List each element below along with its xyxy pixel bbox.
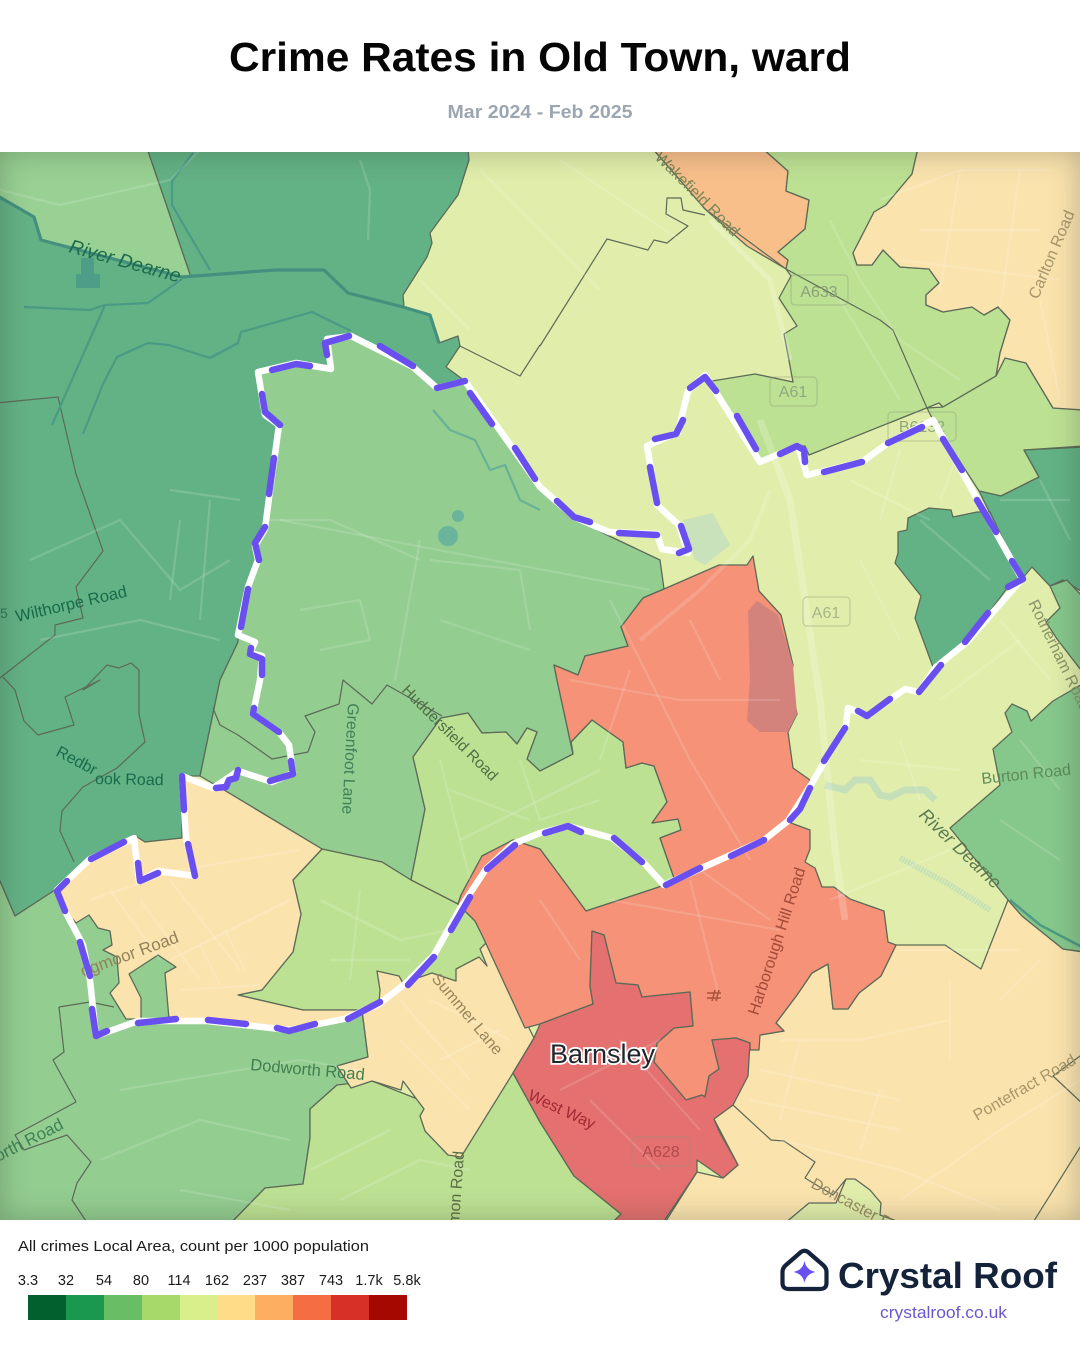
darker hospital patch xyxy=(747,601,797,732)
area: east dark green xyxy=(979,447,1080,593)
legend: colour scale: 80 xyxy=(133,1273,149,1289)
area: south light green xyxy=(230,1073,621,1224)
legend: colour scale: 1.7k xyxy=(355,1273,383,1289)
website link: crystalroof.co.uk xyxy=(880,1304,1008,1322)
area: north-east light green xyxy=(705,148,1010,462)
legend: colour scale: 32 xyxy=(58,1273,74,1289)
map labels: Pontefract Road xyxy=(970,1052,1079,1124)
legend: colour scale: 114 xyxy=(167,1273,191,1289)
area: Hogmoor tan xyxy=(55,776,362,1030)
map labels: Huddersfield Road xyxy=(398,682,501,785)
map labels: River Dearne xyxy=(915,804,1005,893)
area: Doncaster Road pale patch xyxy=(788,1178,896,1220)
map labels: West Way xyxy=(525,1087,598,1133)
map labels: 5 xyxy=(0,605,8,621)
river Dearne east xyxy=(825,780,935,800)
map labels: Dodworth Road xyxy=(250,1056,365,1084)
legend: colour scale: 54 xyxy=(96,1273,112,1289)
area: Carlton tan xyxy=(853,148,1080,410)
area: inner dark green xyxy=(895,508,1022,667)
logo: Crystal Roof: Crystal Roof xyxy=(838,1255,1058,1296)
map labels: Barnsley xyxy=(550,1039,655,1069)
area: Rotherham Road mid green xyxy=(1046,580,1080,674)
map labels: Summer Lane xyxy=(428,971,506,1059)
map labels: B6132 xyxy=(899,419,945,436)
area: east light green xyxy=(927,358,1080,496)
legend: colour scale: 162 xyxy=(205,1273,229,1289)
map labels: mon Road xyxy=(446,1150,468,1225)
legend: colour scale: 3.3 xyxy=(18,1273,38,1289)
area: south-west mid green xyxy=(0,872,368,1224)
icon: house with star xyxy=(782,1251,826,1289)
map labels: Harborough Hill Road xyxy=(746,866,809,1017)
map labels: ogmoor Road xyxy=(78,928,181,981)
area: west dark green xyxy=(0,148,469,916)
area: centre light green xyxy=(241,848,485,1010)
map labels: Carlton Road xyxy=(1026,208,1079,302)
subtitle: date range: Mar 2024 - Feb 2025 xyxy=(448,101,632,122)
area: ward mid green xyxy=(200,336,664,880)
map labels: A628 xyxy=(642,1144,680,1161)
map labels: Wilthorpe Road xyxy=(14,583,129,626)
map labels: Greenfoot Lane xyxy=(338,703,361,815)
map labels: Doncaster Road xyxy=(808,1176,918,1245)
ward boundary purple dashes xyxy=(57,336,1023,1036)
area: Burton Road mid green xyxy=(950,683,1080,952)
area: Barnsley centre red xyxy=(513,931,750,1224)
legend: colour scale: 237 xyxy=(243,1273,267,1289)
minor boundary lines xyxy=(0,148,1080,1224)
legend: colour scale: 743 xyxy=(319,1273,343,1289)
legend: colour scale xyxy=(18,1273,421,1320)
area: Wakefield Road orange xyxy=(652,148,809,269)
area: south-east tan xyxy=(664,900,1080,1224)
park patch xyxy=(683,513,730,565)
map labels: A61 xyxy=(779,384,807,401)
area: town centre salmon xyxy=(458,556,896,1100)
road network xyxy=(0,150,1080,1210)
map labels: River Dearne xyxy=(67,236,183,288)
legend title: All crimes Local Area, count per 1000 population xyxy=(18,1239,369,1255)
map labels: Redbr xyxy=(53,744,100,779)
legend: colour scale: 387 xyxy=(281,1273,305,1289)
map labels: A633 xyxy=(800,284,838,301)
rail station symbol xyxy=(707,990,721,1001)
map labels: Burton Road xyxy=(981,762,1072,788)
area: Huddersfield Road light green xyxy=(411,713,681,911)
road shields xyxy=(632,275,956,1166)
legend: colour scale: 5.8k xyxy=(393,1273,421,1289)
title: Crime Rates in Old Town, ward xyxy=(229,34,851,80)
map labels: ook Road xyxy=(95,771,164,789)
area: Dodworth and Summer Lane tan xyxy=(337,943,534,1157)
map labels: A61 xyxy=(812,605,840,622)
ward boundary: Old Town xyxy=(57,336,1023,1036)
rivers and water xyxy=(0,153,540,510)
map labels: Wakefield Road xyxy=(651,149,743,240)
area: north-west light green xyxy=(0,148,191,277)
